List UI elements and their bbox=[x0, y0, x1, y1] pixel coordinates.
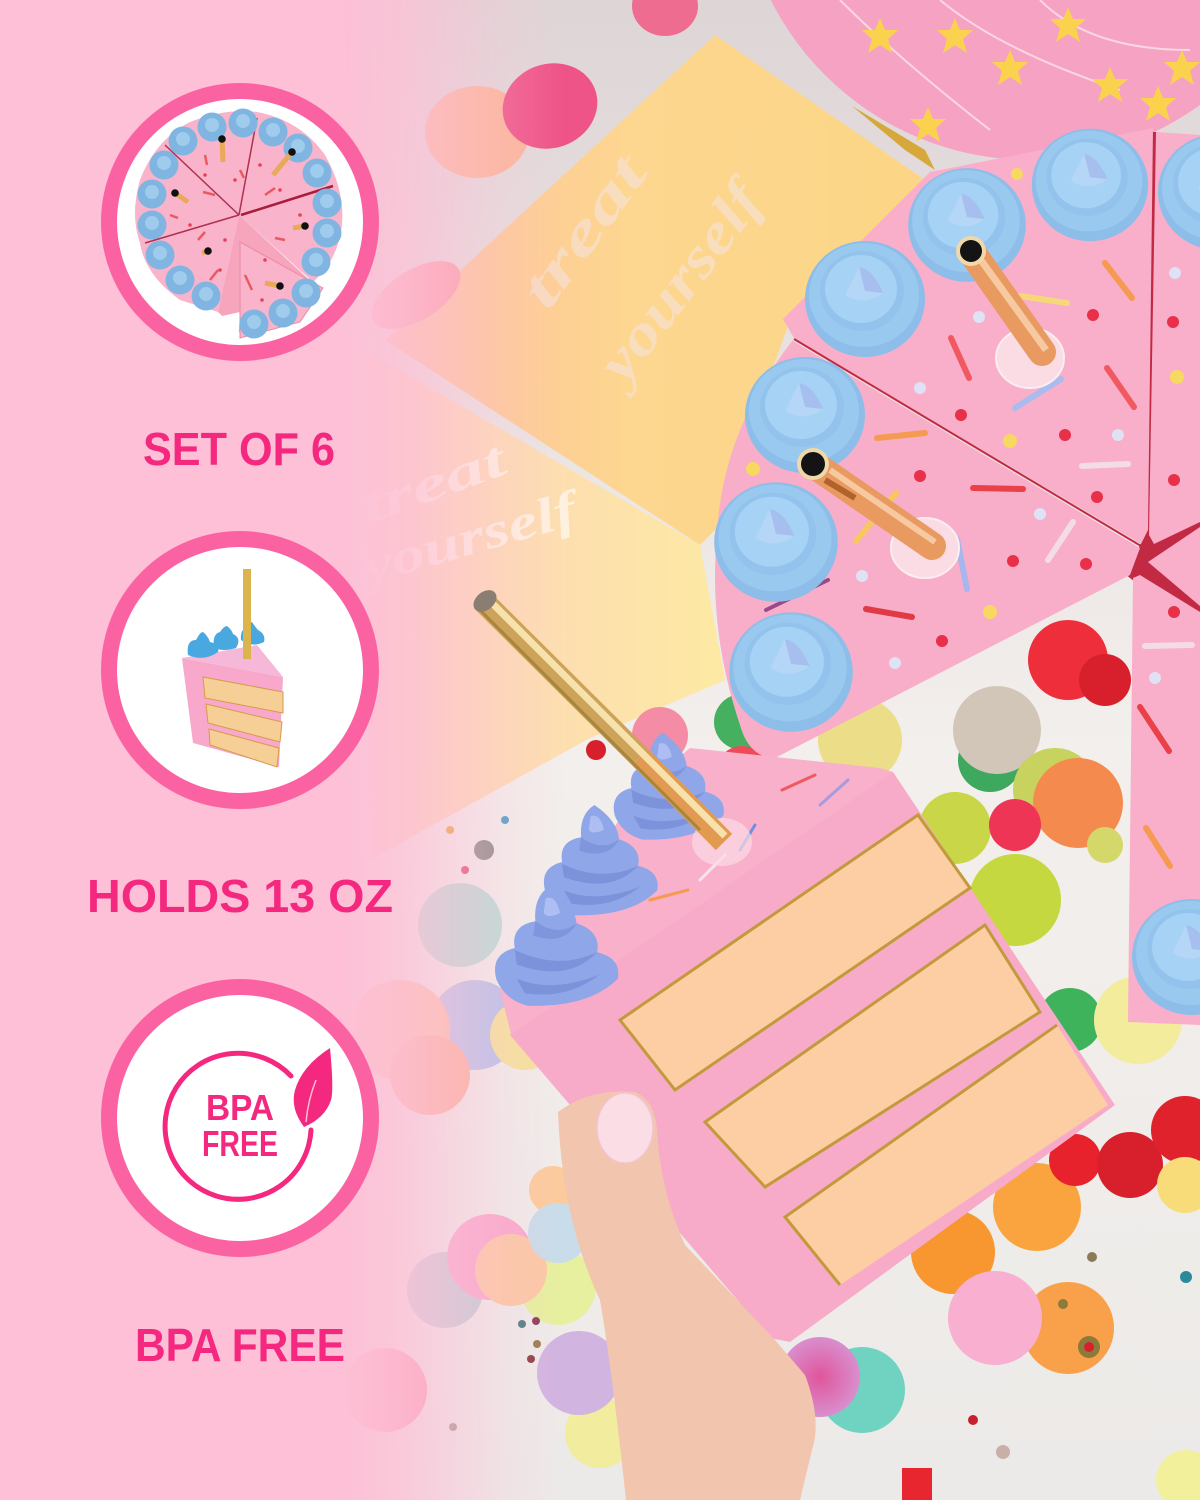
circle icon: single slice bbox=[109, 539, 371, 801]
lavender frosting bbox=[495, 733, 724, 1006]
mini cake bbox=[135, 108, 342, 345]
cake layer 1 bbox=[620, 815, 970, 1090]
yellow napkin bbox=[385, 35, 925, 545]
napkin script line two: yourself bbox=[579, 164, 779, 400]
top face bbox=[500, 748, 893, 1038]
pale napkin script line two: yourself bbox=[349, 479, 588, 596]
seam between slices bbox=[794, 339, 1141, 546]
circle icon: BPA free bbox=[109, 987, 371, 1249]
frosting dollops bbox=[714, 129, 1200, 1015]
fingernail bbox=[597, 1093, 653, 1163]
slice lower right bbox=[1128, 575, 1200, 1025]
sprinkle dots bbox=[746, 168, 1184, 684]
circle icon: whole cake bbox=[109, 91, 371, 353]
BPA FREE text: BPA bbox=[206, 1087, 274, 1128]
side wall bbox=[510, 772, 1115, 1342]
top sprinkles bbox=[650, 775, 848, 900]
pink plate with stars bbox=[740, 0, 1200, 160]
ring bbox=[165, 1053, 311, 1199]
candle straw 2 bbox=[797, 448, 959, 578]
cake layer 2 bbox=[705, 925, 1040, 1187]
gold edge under plate bbox=[852, 106, 935, 170]
cake layer 3 bbox=[785, 1025, 1108, 1285]
pale napkin script line one: treat bbox=[353, 429, 516, 534]
cut out wedge bbox=[218, 215, 316, 335]
napkin script line one: treat bbox=[506, 140, 661, 320]
slice middle right bbox=[1148, 527, 1200, 606]
BPA FREE text bbox=[202, 1087, 278, 1164]
pulled slice bbox=[240, 242, 323, 338]
cake slices top view bbox=[714, 128, 1200, 1025]
dark red centre seams bbox=[1125, 132, 1200, 616]
BPA FREE text: FREE bbox=[202, 1123, 278, 1164]
straw bbox=[243, 569, 251, 659]
held cake slice bbox=[469, 586, 1115, 1342]
slice top right bbox=[1149, 132, 1200, 544]
candle straw 1 bbox=[956, 236, 1064, 388]
slice left bbox=[715, 340, 1140, 759]
label: holds 13 oz: HOLDS 13 OZ bbox=[87, 870, 393, 922]
label: set of 6: SET OF 6 bbox=[143, 423, 335, 475]
slice upper bbox=[783, 128, 1153, 544]
label: bpa free: BPA FREE bbox=[135, 1319, 345, 1371]
hand bbox=[558, 1091, 816, 1500]
mini slice bbox=[182, 622, 283, 767]
confetti scatter bbox=[343, 620, 1200, 1500]
pale napkin bbox=[349, 350, 725, 860]
sprinkles bbox=[766, 263, 1192, 866]
top confetti pieces bbox=[360, 0, 698, 343]
straw bbox=[469, 586, 752, 866]
leaf bbox=[294, 1048, 332, 1127]
